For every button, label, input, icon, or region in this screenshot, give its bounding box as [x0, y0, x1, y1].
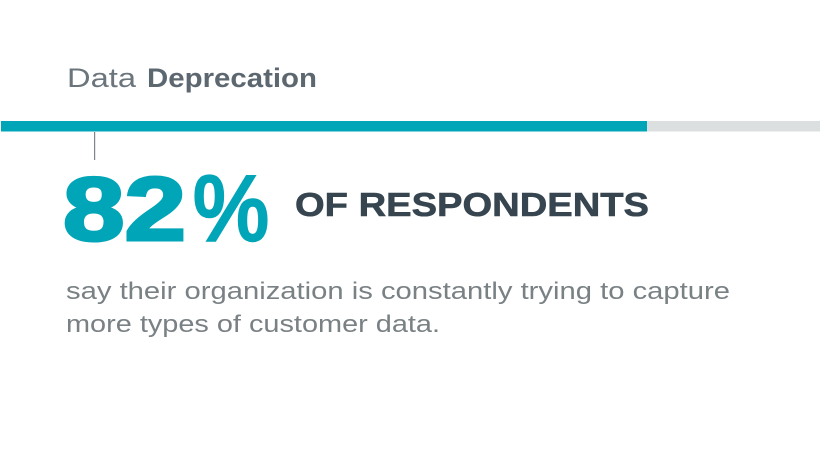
bar fill 82% [1, 121, 647, 132]
description text: say their organization is constantly trying to capture [66, 278, 730, 305]
progress bar [1, 121, 820, 132]
label: of respondents: OF RESPONDENTS [295, 187, 649, 224]
description text [66, 278, 730, 338]
big number: 82%: % [193, 158, 269, 260]
bar track [1, 121, 820, 132]
marker tick [94, 132, 95, 160]
description text: more types of customer data. [66, 311, 440, 338]
big number: 82%: 82 [63, 160, 186, 260]
big number: 82% [63, 158, 269, 260]
heading: Data Deprecation: Data [67, 63, 136, 93]
heading: Data Deprecation [67, 63, 317, 93]
heading: Data Deprecation: Deprecation [147, 63, 317, 93]
